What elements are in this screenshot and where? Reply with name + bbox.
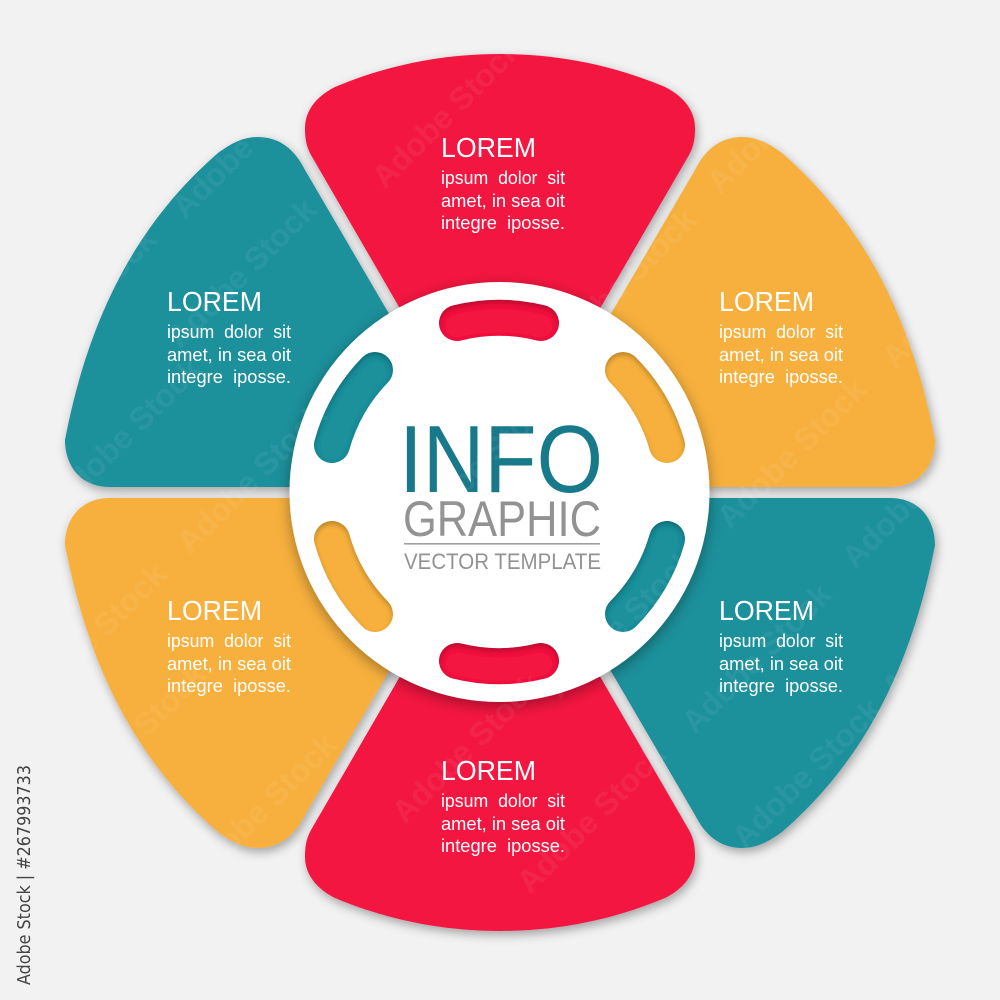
watermark: Adobe Stock xyxy=(699,36,863,200)
title: INFO: INFO xyxy=(399,406,603,513)
text block: bottom: ipsum dolor sit xyxy=(441,791,565,811)
watermark: Adobe Stock xyxy=(674,576,838,740)
watermark: Adobe Stock xyxy=(509,736,673,900)
panel: upper right yellow petal xyxy=(605,137,935,487)
panel: top red petal xyxy=(305,54,695,312)
text block: bottom: amet, in sea oit xyxy=(441,814,565,834)
side credit text: Adobe Stock | #267993733 xyxy=(14,765,35,985)
text block: upper right: LOREM xyxy=(719,286,814,317)
text block: lower right: ipsum dolor sit xyxy=(719,631,843,651)
watermark: Adobe Stock xyxy=(34,16,198,180)
subtitle: vector template: VECTOR TEMPLATE xyxy=(404,549,601,574)
panel: lower right teal petal xyxy=(605,498,935,848)
text block: top xyxy=(441,132,565,233)
panel: bottom red petal xyxy=(305,673,695,931)
text block: top: ipsum dolor sit xyxy=(441,168,565,188)
text block: top: integre iposse. xyxy=(441,213,565,233)
text block: lower left: integre iposse. xyxy=(167,676,291,696)
text block: lower right: integre iposse. xyxy=(719,676,843,696)
text block: upper left xyxy=(167,286,291,387)
watermark: Adobe Stock xyxy=(724,691,888,855)
text block: upper right: integre iposse. xyxy=(719,367,843,387)
watermark: Adobe Stock xyxy=(834,81,998,245)
watermark: Adobe Stock xyxy=(539,201,703,365)
text block: lower left xyxy=(167,595,291,696)
watermark: Adobe Stock xyxy=(364,31,528,195)
text block: upper left: ipsum dolor sit xyxy=(167,322,291,342)
slot: top red xyxy=(457,318,541,323)
text block: lower left: amet, in sea oit xyxy=(167,654,291,674)
panel: lower left yellow petal xyxy=(65,498,395,848)
divider line xyxy=(404,543,600,545)
text block: lower left: LOREM xyxy=(167,595,262,626)
text block: bottom: integre iposse. xyxy=(441,836,565,856)
watermark: Adobe Stock xyxy=(539,541,703,705)
text block: bottom xyxy=(441,755,565,856)
text block: upper right: ipsum dolor sit xyxy=(719,322,843,342)
watermark: Adobe Stock xyxy=(399,381,563,545)
text block: top: LOREM xyxy=(441,132,536,163)
text block: upper right xyxy=(719,286,843,387)
watermark: Adobe Stock xyxy=(384,666,548,830)
watermark: Adobe Stock xyxy=(164,61,328,225)
text block: lower left: ipsum dolor sit xyxy=(167,631,291,651)
text block: lower right: LOREM xyxy=(719,595,814,626)
watermark: Adobe Stock xyxy=(834,411,998,575)
center white circle xyxy=(290,282,710,702)
text block: upper left: LOREM xyxy=(167,286,262,317)
text block: lower right xyxy=(719,595,843,696)
watermark: Adobe Stock xyxy=(9,556,173,720)
slot: upper right yellow xyxy=(623,370,667,445)
watermark: Adobe Stock xyxy=(0,221,163,385)
watermark: Adobe Stock xyxy=(159,191,323,355)
text block: upper right: amet, in sea oit xyxy=(719,345,843,365)
panel: upper left teal petal xyxy=(65,137,395,487)
text block: lower right: amet, in sea oit xyxy=(719,654,843,674)
slot: bottom red xyxy=(457,661,541,666)
watermark: Adobe Stock xyxy=(44,351,208,515)
text block: upper left: integre iposse. xyxy=(167,367,291,387)
watermark: Adobe Stock xyxy=(49,656,213,820)
text block: bottom: LOREM xyxy=(441,755,536,786)
title: GRAPHIC: GRAPHIC xyxy=(403,491,601,547)
slot: lower right teal xyxy=(623,539,667,614)
slot: lower left yellow xyxy=(332,539,375,614)
watermark: Adobe Stock xyxy=(709,371,873,535)
slot: upper left teal xyxy=(332,370,375,445)
watermark: Adobe Stock xyxy=(179,726,343,890)
text block: top: amet, in sea oit xyxy=(441,191,565,211)
text block: upper left: amet, in sea oit xyxy=(167,345,291,365)
watermark: Adobe Stock xyxy=(169,396,333,560)
